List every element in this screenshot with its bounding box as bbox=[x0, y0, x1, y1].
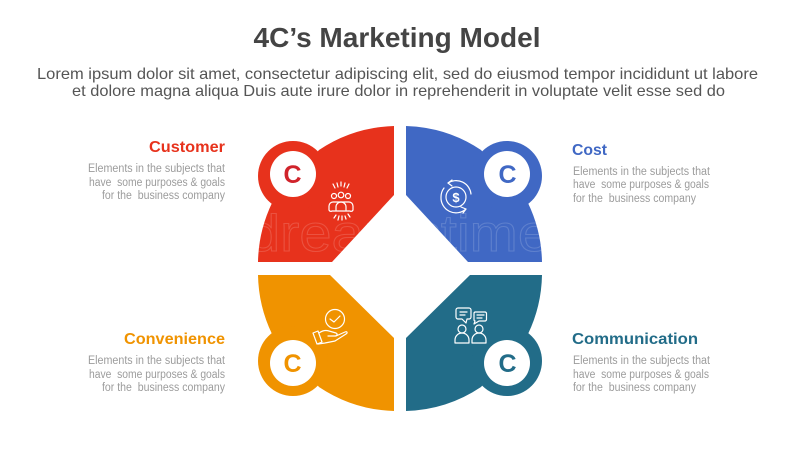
icon: hand with check bbox=[313, 310, 347, 344]
cost badge: C bbox=[498, 161, 517, 189]
title: 4C’s Marketing Model bbox=[254, 22, 540, 53]
subtitle text bbox=[37, 66, 758, 100]
text block: communication: Elements in the subjects that bbox=[573, 355, 711, 367]
icon: dollar cycle: $ bbox=[452, 190, 460, 205]
text block: communication: for the business company bbox=[573, 382, 696, 394]
watermark: dreamstime bbox=[248, 205, 550, 263]
panel: convenience segment bbox=[258, 275, 394, 411]
text block: customer: Customer bbox=[149, 139, 225, 156]
text block: customer: for the business company bbox=[102, 190, 225, 202]
text block: convenience: Elements in the subjects that bbox=[88, 355, 226, 367]
panel: cost segment bbox=[406, 126, 542, 262]
text block: cost: Elements in the subjects that bbox=[573, 166, 711, 178]
text block: cost: for the business company bbox=[573, 193, 696, 205]
communication badge: C bbox=[498, 350, 517, 378]
text block: convenience: Convenience bbox=[124, 331, 225, 348]
text block: cost: Cost bbox=[572, 142, 608, 159]
text block: cost: have some purposes & goals bbox=[573, 179, 709, 191]
subtitle text: et dolore magna aliqua Duis aute irure dolor in reprehenderit in voluptate velit esse sed do bbox=[72, 83, 725, 100]
icon: two people talking bbox=[455, 308, 486, 343]
text block: convenience: have some purposes & goals bbox=[89, 369, 225, 381]
text block: customer: Elements in the subjects that bbox=[88, 163, 226, 175]
icon: people group bbox=[329, 182, 353, 220]
subtitle text: Lorem ipsum dolor sit amet, consectetur adipiscing elit, sed do eiusmod tempor incididunt ut labore bbox=[37, 66, 758, 83]
text block: convenience: for the business company bbox=[102, 382, 225, 394]
text block: convenience bbox=[88, 331, 226, 394]
text block: customer: have some purposes & goals bbox=[89, 177, 225, 189]
panel: customer segment bbox=[258, 126, 394, 262]
text block: communication: Communication bbox=[572, 331, 698, 348]
text block: cost bbox=[572, 142, 711, 205]
customer badge: C bbox=[283, 161, 302, 189]
text block: customer bbox=[88, 139, 226, 202]
convenience badge: C bbox=[283, 350, 302, 378]
panel: communication segment bbox=[406, 275, 542, 411]
text block: communication bbox=[572, 331, 711, 394]
text block: communication: have some purposes & goals bbox=[573, 369, 709, 381]
